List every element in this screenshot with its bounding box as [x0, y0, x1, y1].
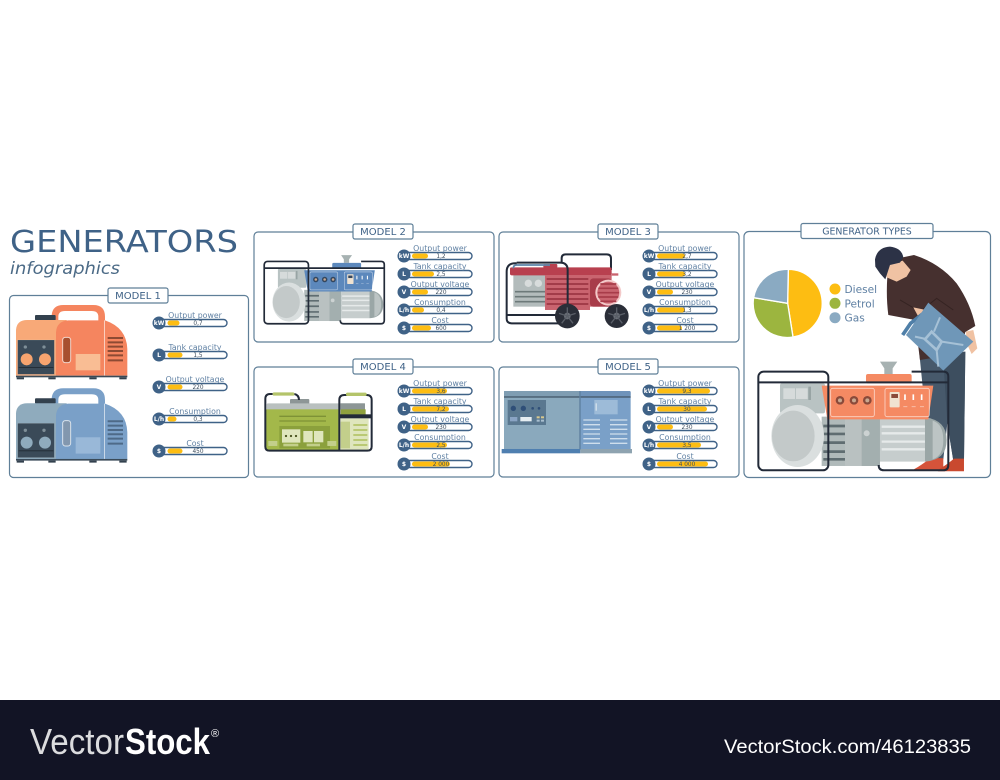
stats: model 2: 2,5: [436, 272, 446, 278]
subtitle: infographics: [10, 259, 120, 279]
stats: model 4: V: [402, 424, 407, 431]
stats: model 4: 2,5: [436, 443, 446, 449]
stats: model 2: 600: [435, 326, 447, 332]
title: GENERATORS: [10, 225, 238, 260]
footer bar: [0, 700, 1000, 780]
panel: model 5: [499, 359, 739, 477]
stats: model 2: L/h: [399, 307, 409, 314]
footer logo: [30, 721, 219, 762]
pie chart: fuel types: [753, 269, 822, 337]
stats: model 5: 4 000: [679, 462, 696, 468]
model 4 heading: [353, 359, 413, 374]
stats: model 1: Tank capacity: [167, 343, 222, 352]
model 3 heading: MODEL 3: [605, 227, 651, 238]
stats: model 2: 1,2: [436, 254, 446, 260]
stats: model 4: $: [402, 461, 406, 468]
stats: model 4: 3,6: [436, 389, 446, 395]
footer logo: Vector: [30, 721, 124, 762]
stats: model 4: Output power: [413, 379, 468, 388]
model 3 heading: [598, 224, 658, 239]
stats: model 3: [642, 244, 717, 334]
stats: model 2: Tank capacity: [412, 262, 467, 271]
stats: model 1: [152, 311, 227, 458]
stats: model 2: Output power: [413, 244, 468, 253]
stats: model 3: Tank capacity: [657, 262, 712, 271]
footer image id: VectorStock.com/46123835: [724, 737, 971, 758]
legend: fuel types: Diesel: [844, 284, 877, 296]
illustration: open frame generator with blue panel: [264, 255, 384, 324]
stats: model 4: Tank capacity: [412, 397, 467, 406]
stats: model 1: 450: [192, 449, 204, 455]
footer logo: Stock: [125, 721, 211, 762]
stats: model 1: 0,7: [193, 321, 203, 327]
stats: model 4: 230: [435, 425, 447, 431]
panel: model 1: [10, 288, 248, 478]
stats: model 3: 1,3: [682, 308, 692, 314]
generator types heading: GENERATOR TYPES: [822, 226, 912, 238]
stats: model 3: $: [647, 325, 651, 332]
stats: model 4: 7,2: [436, 407, 446, 413]
illustration: large open frame generator: [758, 362, 948, 470]
illustration: red generator on wheels: [507, 254, 629, 328]
stats: model 3: kW: [644, 253, 655, 260]
stats: model 4: kW: [399, 388, 410, 395]
stats: model 1: Output voltage: [166, 375, 225, 384]
stats: model 5: Consumption: [659, 433, 711, 442]
footer logo: ®: [211, 728, 219, 740]
illustration: man pouring fuel: [875, 247, 977, 471]
stats: model 4: [398, 379, 472, 470]
model 1 heading: [108, 288, 168, 303]
stats: model 1: kW: [154, 320, 165, 327]
legend: fuel types: [830, 284, 877, 325]
illustration: blue stationary generator: [502, 391, 632, 453]
stats: model 2: Cost: [431, 316, 449, 325]
stats: model 4: 2 000: [433, 462, 450, 468]
model 4 heading: MODEL 4: [360, 362, 406, 373]
stats: model 5: 9,3: [682, 389, 692, 395]
panel: model 4: [254, 359, 494, 477]
stats: model 1: V: [157, 384, 162, 391]
stats: model 2: 220: [435, 290, 447, 296]
stats: model 5: L: [647, 406, 651, 413]
stats: model 3: Consumption: [659, 298, 711, 307]
legend: fuel types: Gas: [844, 313, 865, 325]
model 2 heading: MODEL 2: [360, 227, 406, 238]
stats: model 2: V: [402, 289, 407, 296]
stats: model 2: L: [402, 271, 406, 278]
stats: model 3: Cost: [676, 316, 694, 325]
stats: model 1: Consumption: [169, 407, 221, 416]
stats: model 3: L: [647, 271, 651, 278]
legend: fuel types: Petrol: [844, 298, 875, 310]
model 1 heading: MODEL 1: [115, 291, 161, 302]
stats: model 5: 230: [681, 425, 693, 431]
illustration: green enclosed generator: [265, 392, 372, 451]
stats: model 5: V: [647, 424, 652, 431]
model 5 heading: [598, 359, 658, 374]
panel: model 2: [254, 224, 494, 342]
stats: model 4: Output voltage: [411, 415, 470, 424]
illustration: blue portable generator: [16, 388, 127, 463]
stats: model 4: Consumption: [414, 433, 466, 442]
stats: model 1: Output power: [168, 311, 223, 320]
stats: model 5: Cost: [676, 452, 694, 461]
stats: model 2: $: [402, 325, 406, 332]
stats: model 3: L/h: [644, 307, 654, 314]
stats: model 5: L/h: [644, 442, 654, 449]
stats: model 5: Tank capacity: [657, 397, 712, 406]
stats: model 5: 3,5: [682, 443, 692, 449]
stats: model 1: 1,5: [193, 353, 203, 359]
stats: model 1: $: [157, 448, 161, 455]
stats: model 2: Consumption: [414, 298, 466, 307]
panel: generator types: [744, 224, 990, 478]
stats: model 4: Cost: [431, 452, 449, 461]
stats: model 1: L: [157, 352, 161, 359]
stats: model 5: $: [647, 461, 651, 468]
stats: model 5: Output voltage: [656, 415, 715, 424]
stats: model 5: Output power: [658, 379, 713, 388]
stats: model 1: Cost: [186, 439, 204, 448]
stats: model 2: kW: [399, 253, 410, 260]
model 2 heading: [353, 224, 413, 239]
stats: model 1: L/h: [154, 416, 164, 423]
stats: model 3: Output power: [658, 244, 713, 253]
stats: model 4: L: [402, 406, 406, 413]
stats: model 2: [398, 244, 472, 334]
stats: model 3: 2,7: [682, 254, 692, 260]
stats: model 5: 30: [683, 407, 691, 413]
stats: model 5: kW: [644, 388, 655, 395]
generator types heading: [801, 224, 933, 238]
stats: model 3: 3,2: [682, 272, 692, 278]
illustration: orange portable generator: [16, 305, 127, 379]
stats: model 3: Output voltage: [656, 280, 715, 289]
stats: model 2: 0,4: [436, 308, 446, 314]
stats: model 1: 220: [192, 385, 204, 391]
model 5 heading: MODEL 5: [605, 362, 651, 373]
stats: model 3: V: [647, 289, 652, 296]
stats: model 3: 1 200: [679, 326, 696, 332]
panel: model 3: [499, 224, 739, 342]
stats: model 2: Output voltage: [411, 280, 470, 289]
stats: model 4: L/h: [399, 442, 409, 449]
stats: model 5: [642, 379, 717, 470]
stats: model 1: 0,3: [193, 417, 203, 423]
stats: model 3: 230: [681, 290, 693, 296]
